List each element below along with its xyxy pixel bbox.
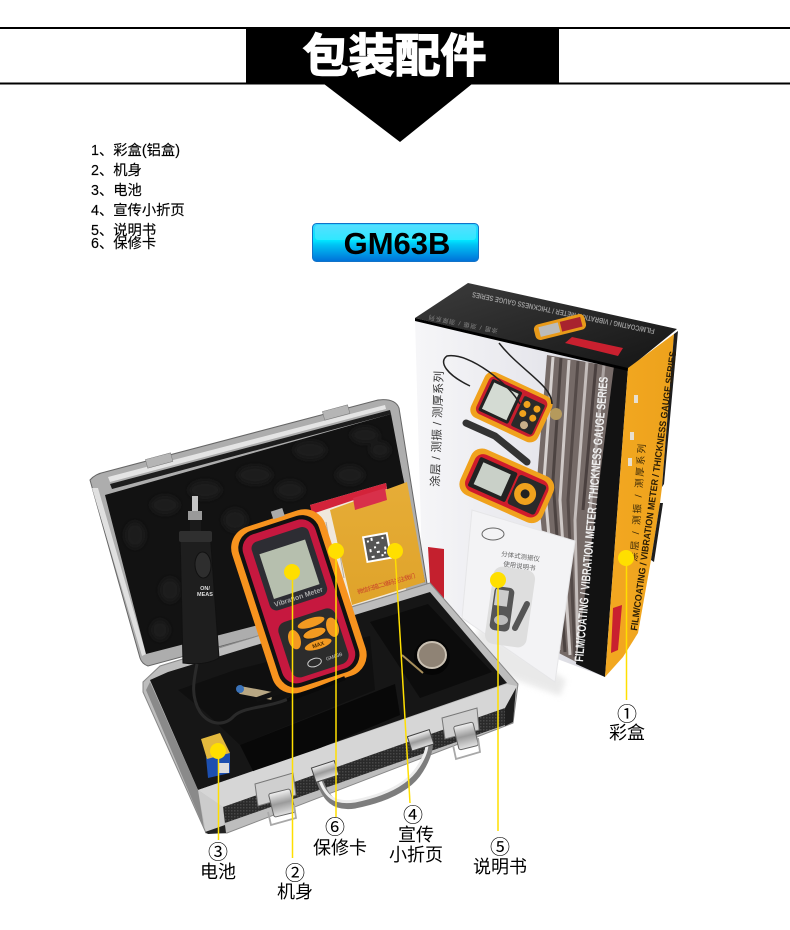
callout label 2: 机身 [277, 882, 313, 902]
box top tag [565, 337, 623, 356]
connector [240, 690, 272, 696]
callout label 2: ② [285, 862, 305, 885]
callout label 6 [313, 816, 367, 858]
callout label 1: 彩盒 [609, 723, 645, 743]
base front lip [198, 684, 517, 807]
callout label 2 [277, 862, 313, 902]
vibration probe [179, 496, 290, 723]
leaflet caption: 微信扫描二维码关注我们 [356, 572, 416, 596]
base recesses [370, 604, 492, 698]
handle [318, 735, 430, 806]
box top mini meter [533, 313, 587, 341]
model badge [312, 224, 478, 262]
box side Chinese title: 涂层 / 测振 / 测厚系列 [628, 444, 648, 562]
base interior [150, 592, 507, 790]
base carbon strip [223, 708, 505, 823]
title banner [246, 27, 559, 84]
product box [415, 283, 679, 677]
manual title: 分体式测振仪 [501, 549, 541, 563]
case latches and handle [255, 708, 480, 825]
lid hinges [145, 453, 173, 468]
contents list: 6、保修卡 [91, 235, 156, 252]
box meter bottom [456, 445, 558, 527]
contents list [91, 142, 185, 252]
callout label 4: 宣传 [398, 825, 434, 845]
model badge: GM63B [344, 226, 450, 261]
header band [0, 27, 790, 142]
meter display [250, 525, 329, 612]
callout dots [210, 543, 634, 759]
meter top connector [271, 508, 285, 519]
box front series title: FILM/COATING / VIBRATION METER / THICKNESS GAUGE SERIES [572, 376, 611, 662]
leaflet QR code [362, 532, 392, 563]
box side face [605, 334, 674, 677]
right latch [442, 708, 479, 739]
callout label 4: ④ [403, 804, 423, 827]
lid foam [105, 414, 425, 654]
callout label 5 [473, 836, 527, 877]
manual: 使用说明书 [503, 559, 537, 573]
box side tag [611, 605, 622, 653]
contents list: 2、机身 [91, 162, 142, 179]
callout label 3: 电池 [200, 862, 236, 882]
aluminum case base [143, 583, 518, 834]
meter [223, 497, 372, 699]
manual [462, 510, 575, 696]
meter model: GM63B [325, 651, 344, 663]
box red strip [428, 547, 444, 600]
box front face [415, 319, 628, 677]
callout label 5: ⑤ [490, 836, 510, 859]
box front Chinese title: 涂层 / 测振 / 测厚系列 [428, 371, 446, 487]
callout label 6: ⑥ [325, 816, 345, 839]
box top text: FILM/COATING / VIBRATION METER / THICKNESS GAUGE SERIES [471, 290, 655, 336]
arrow [324, 84, 472, 142]
probe label: ON/ [200, 586, 210, 592]
leaflet red tag [353, 488, 387, 510]
box meter top [467, 369, 556, 445]
callout label 4 [389, 804, 443, 865]
box side model tags [628, 395, 638, 466]
callout label 5: 说明书 [473, 857, 527, 877]
callout label 3 [200, 841, 236, 882]
meter keypad [276, 606, 351, 680]
aluminum case lid [90, 400, 428, 666]
callout label 3: ③ [208, 841, 228, 864]
left latch [255, 773, 296, 806]
vibration probe: MEAS [197, 592, 213, 598]
coin sensor [414, 639, 450, 675]
box top small text: 涂层 / 测振 / 测厚系列 [428, 313, 498, 335]
box probe cables [444, 356, 520, 404]
warranty card [310, 483, 406, 606]
box front photo stripes [537, 355, 620, 665]
sensor rod [402, 655, 423, 673]
manual picture [484, 565, 536, 649]
meter: MAX [312, 641, 326, 650]
manual logo [482, 528, 504, 540]
probe cable [194, 664, 290, 723]
contents list: 5、说明书 [91, 222, 156, 239]
contents list: 4、宣传小折页 [91, 202, 185, 219]
callout label 6: 保修卡 [313, 838, 367, 858]
box probe tip [550, 408, 562, 420]
meter display caption: Vibration Meter [274, 586, 324, 609]
title: 包装配件 [302, 30, 486, 82]
box top face [415, 283, 677, 369]
box side series title: FILM/COATING / VIBRATION METER / THICKNESS GAUGE SERIES [629, 351, 679, 631]
box front black strip [576, 366, 628, 677]
callout label 1: ① [617, 703, 637, 726]
cable over meter [287, 678, 345, 700]
base hinge side [146, 682, 204, 828]
callout label 1 [609, 703, 645, 743]
base corner [198, 790, 225, 833]
callout lines [218, 551, 626, 858]
callout label 4: 小折页 [389, 845, 443, 865]
promo leaflet [330, 482, 425, 605]
battery [201, 733, 230, 778]
contents list: 3、电池 [91, 182, 142, 199]
contents list: 1、彩盒(铝盒) [91, 142, 180, 159]
handle mounts [311, 761, 339, 782]
